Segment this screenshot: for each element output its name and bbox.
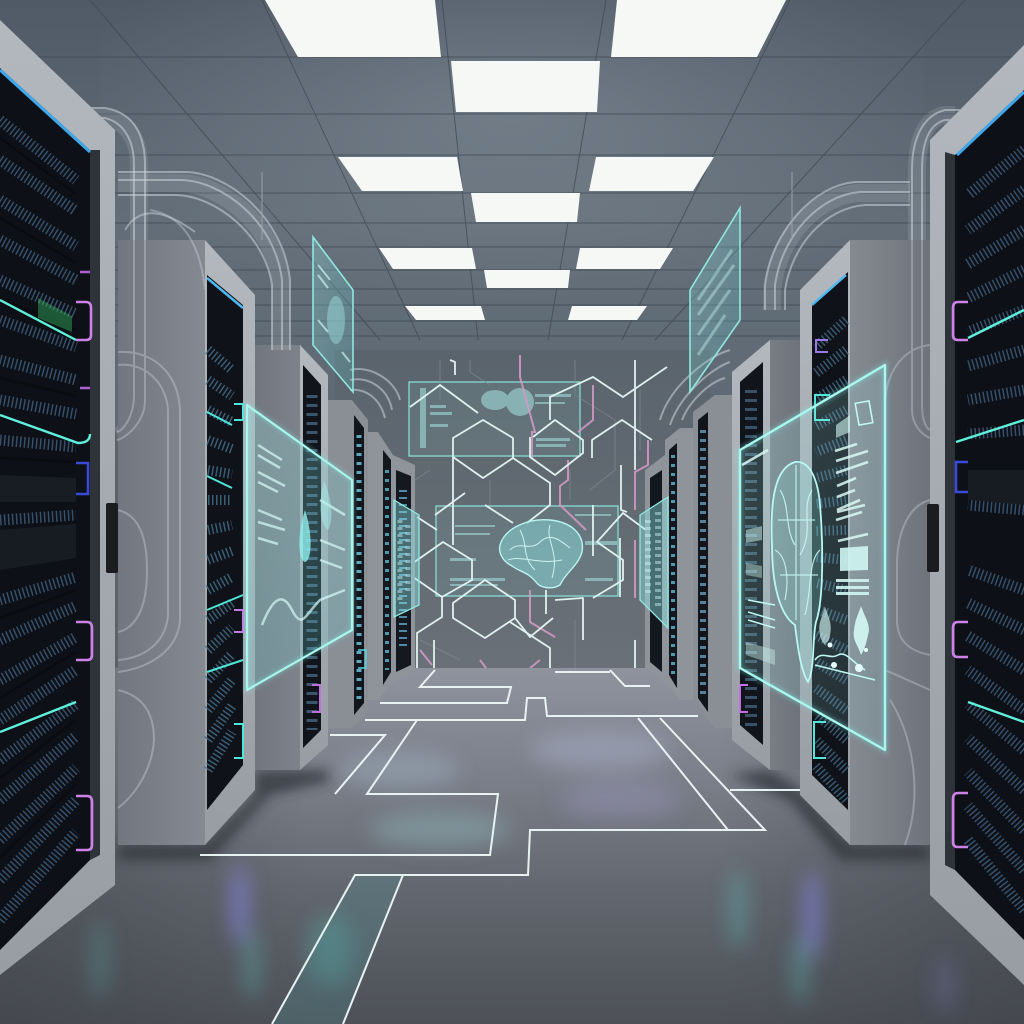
brain on wall [500, 520, 582, 588]
rack R5 [665, 428, 693, 700]
green glow [38, 298, 72, 332]
frame [0, 20, 115, 975]
server row separators [0, 138, 76, 858]
back wall with circuit hexagons [335, 350, 710, 672]
panel brain [772, 462, 822, 682]
purple LED brackets [76, 272, 92, 850]
purple LED brackets [953, 302, 968, 847]
dark server faceplates [0, 475, 76, 570]
dark bay [0, 68, 90, 950]
dark bay [955, 90, 1024, 940]
panel diamond shapes [819, 606, 869, 655]
pink circuit traces [420, 355, 648, 668]
LED brackets [814, 340, 830, 758]
door handle [106, 503, 118, 573]
rack L2 [118, 210, 255, 845]
teal floor strip [272, 875, 403, 1024]
rack R3 [732, 340, 800, 770]
frame shadow edge [90, 150, 100, 860]
far left racks [255, 345, 415, 770]
rack L6 [393, 455, 415, 682]
rack R6 [645, 455, 665, 682]
bay blue top edge [207, 278, 243, 308]
ceiling lights [265, 0, 786, 320]
glass cables left [88, 108, 400, 440]
rack L3 [255, 345, 328, 770]
glass cables right [660, 110, 960, 438]
panel data lines [258, 445, 345, 625]
server rows [968, 150, 1024, 910]
purple LEDs [234, 610, 243, 632]
far right racks [645, 340, 800, 770]
wall hologram panels [409, 382, 618, 596]
white hexagon traces [410, 360, 667, 672]
server rows [208, 350, 232, 770]
small light antennas [262, 172, 792, 240]
floor reflections [90, 730, 955, 1015]
panel dots [828, 642, 868, 672]
dark bay [812, 272, 848, 810]
frame [930, 45, 1024, 985]
dim background hexagons [415, 360, 640, 670]
dark server faceplates [968, 470, 1024, 505]
rack R1 [927, 45, 1024, 985]
front frame [800, 240, 850, 845]
dark bay [207, 275, 243, 810]
teal LED lines [0, 300, 90, 732]
panel solid blocks [746, 526, 869, 665]
server rows [0, 120, 76, 920]
panel droplet figure [299, 510, 311, 562]
floor circuit lines [200, 670, 800, 1024]
holographic panel: mid left small [394, 500, 419, 617]
rack L4 [328, 400, 368, 728]
rack R4 [693, 395, 732, 728]
side panel [118, 240, 205, 845]
rack R2 [800, 240, 930, 845]
holographic panel: mid right small [640, 497, 668, 628]
holographic panel: top right [690, 208, 740, 392]
panel small chart [836, 415, 850, 438]
holographic panel: large right [740, 365, 885, 750]
panel wave and small nodes [748, 401, 875, 680]
bay blue top edge [812, 275, 846, 305]
wall panel data marks [420, 388, 617, 586]
glass cable over side panel [885, 240, 930, 845]
ceiling [0, 0, 1024, 430]
rack L1 [0, 20, 118, 975]
panel text lines [742, 444, 868, 541]
bay blue top edge [0, 70, 90, 152]
rack contact shadows [118, 770, 930, 860]
front frame [205, 240, 255, 845]
glass cable over side panel [118, 210, 205, 808]
holographic panel: top left [313, 237, 353, 392]
frame shadow edge [945, 152, 955, 870]
teal LED lines [956, 310, 1024, 722]
rack L5 [368, 432, 393, 700]
door handle [927, 504, 939, 572]
server rows [816, 320, 846, 800]
bay blue top edge [957, 92, 1024, 155]
holographic panel: large left [247, 405, 352, 690]
teal LEDs [207, 404, 243, 758]
floor [0, 668, 1024, 1024]
side panel [850, 240, 930, 845]
